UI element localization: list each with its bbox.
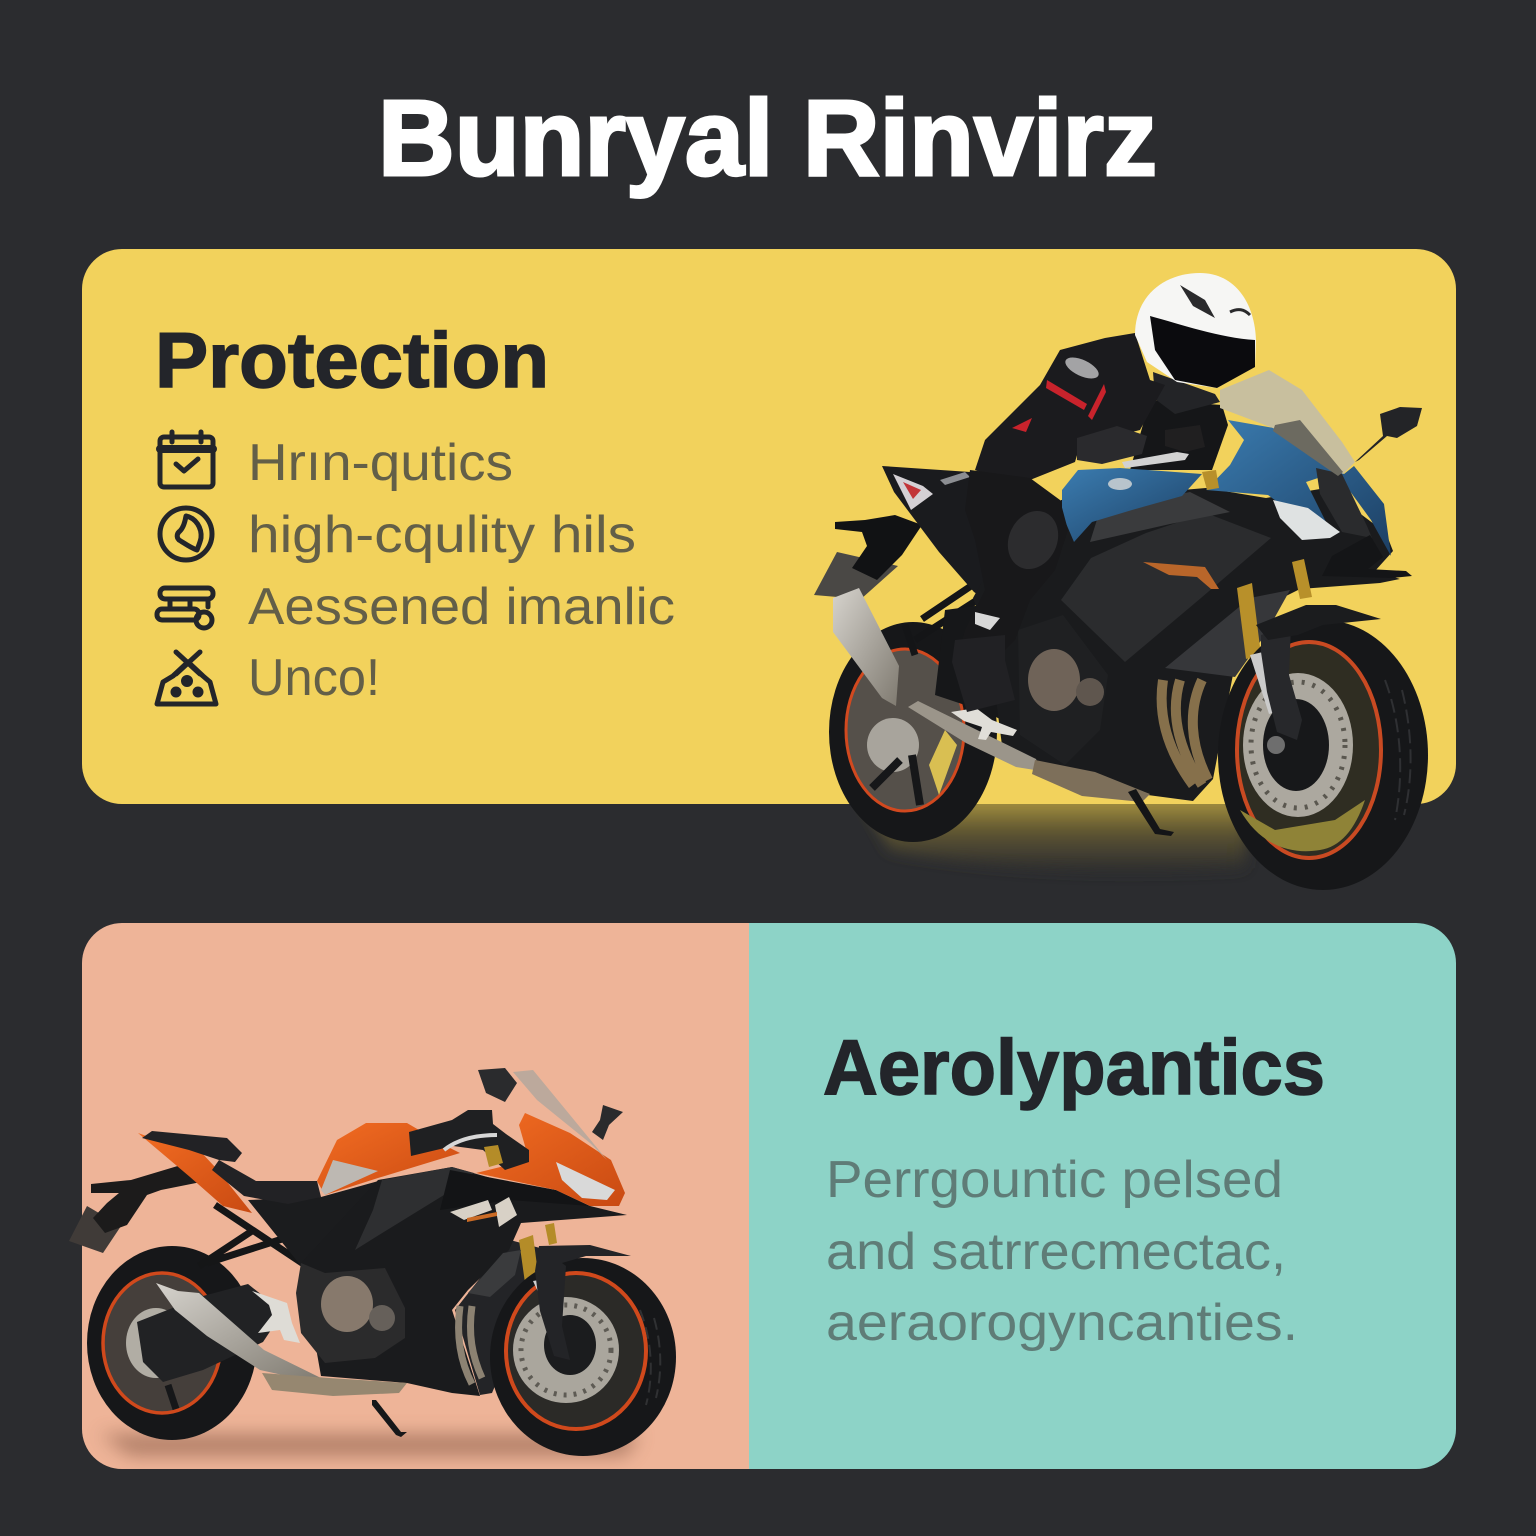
- mirrors: [1153, 372, 1220, 414]
- body text: and satrrecmectac,: [826, 1223, 1286, 1281]
- chrome fork tube: [533, 1279, 560, 1320]
- exhaust collector: [1032, 760, 1150, 802]
- chrome fork tube: [1250, 652, 1281, 714]
- trousers: [960, 470, 1068, 650]
- grey tank flank: [1090, 492, 1230, 542]
- rider: [952, 273, 1256, 712]
- foot peg: [951, 708, 1017, 740]
- seat highlight: [940, 472, 970, 485]
- tail fairing orange: [138, 1133, 252, 1213]
- kickstand: [1128, 789, 1174, 836]
- knee pad: [999, 503, 1067, 577]
- headlight: [1273, 500, 1340, 540]
- right mirror: [1355, 407, 1422, 462]
- boot: [952, 635, 1015, 712]
- rear wheel: [87, 1246, 257, 1440]
- blue upper fairing: [1206, 420, 1391, 556]
- windscreen: [1220, 370, 1355, 474]
- windscreen dark lower: [1273, 420, 1343, 476]
- front fender and fork leg: [535, 1245, 631, 1360]
- list item 3: Aessened imanlic: [248, 578, 675, 636]
- jacket red accent: [1012, 380, 1106, 432]
- front fender: [1256, 605, 1381, 640]
- radiator: [468, 1250, 521, 1297]
- handlebar lever: [1122, 452, 1189, 468]
- left mirror: [478, 1068, 517, 1102]
- helmet: [1135, 273, 1256, 388]
- tail bracket: [91, 1165, 206, 1233]
- gold forks: [1202, 470, 1312, 659]
- windscreen: [513, 1070, 607, 1160]
- upper fairing panel: [1061, 513, 1271, 662]
- orange decal: [1143, 562, 1219, 589]
- foot peg: [252, 1291, 300, 1343]
- tail bracket: [835, 515, 922, 580]
- handlebar and dash: [409, 1110, 529, 1170]
- licence plate: [69, 1206, 121, 1253]
- headers: [458, 1306, 482, 1384]
- tank grey panel: [321, 1160, 378, 1195]
- tail light: [893, 474, 933, 510]
- icon: crossed pile: [157, 652, 216, 704]
- swingarm: [137, 1284, 283, 1382]
- blue tank: [1062, 468, 1202, 542]
- rear wheel: [829, 622, 997, 842]
- radiator backing: [455, 1240, 540, 1395]
- ground glow under blue motorcycle: [870, 804, 1250, 868]
- jacket: [975, 333, 1165, 480]
- tail section: [882, 466, 1004, 612]
- chin and turn signal: [1322, 535, 1412, 578]
- main fairing: [301, 1167, 627, 1396]
- muffler and exhaust: [156, 1283, 325, 1380]
- panel: aerodynamics: [82, 923, 1456, 1469]
- black shoulder band: [440, 1170, 590, 1210]
- rear frame block: [248, 1180, 419, 1266]
- heading: protection: Protection: [155, 316, 549, 404]
- chrome lever: [444, 1135, 497, 1150]
- panel half: peach image area: [82, 923, 749, 1469]
- headlight: [556, 1162, 615, 1200]
- front wheel: [1218, 620, 1428, 890]
- icon: bench with gear: [157, 588, 213, 628]
- title: Bunryal Rinvirz: [378, 77, 1157, 198]
- fork leg: [1261, 625, 1302, 740]
- seat: [142, 1131, 321, 1204]
- panel: protection: [82, 249, 1456, 804]
- right mirror: [592, 1105, 623, 1140]
- gold fork: [484, 1145, 557, 1283]
- icon: calendar check: [160, 432, 213, 487]
- engine: [296, 1263, 405, 1363]
- icon: clock dial: [160, 508, 212, 560]
- list item 2: high-cqulity hils: [248, 506, 636, 564]
- front wheel: [490, 1258, 676, 1456]
- glove: [1077, 426, 1147, 464]
- orange tank: [317, 1123, 460, 1195]
- body text: Perrgountic pelsed: [826, 1151, 1283, 1209]
- radiator: [1165, 590, 1290, 677]
- body silhouette: [973, 488, 1400, 801]
- boot stripe: [975, 612, 1000, 630]
- illustration: blue motorcycle with rider: [814, 273, 1428, 890]
- tank logo: [1108, 478, 1132, 490]
- panel half: teal text area: [749, 923, 1456, 1469]
- body text: [826, 1151, 1298, 1352]
- list item 4: Unco!: [248, 649, 380, 707]
- illustration: orange motorcycle: [69, 1068, 676, 1456]
- dash: [1165, 425, 1205, 452]
- controls block behind fairing: [1130, 400, 1228, 470]
- licence plate: [814, 552, 898, 599]
- subframe struts: [199, 1205, 305, 1266]
- decal: [450, 1197, 517, 1227]
- fairing highlight: [355, 1167, 474, 1250]
- panel background: yellow: [82, 249, 1456, 804]
- body text: aeraorogyncanties.: [826, 1294, 1298, 1352]
- shoulder badge: [1062, 353, 1102, 383]
- frame fill behind boot: [935, 600, 1025, 730]
- list item 1: Hrın-qutics: [248, 434, 513, 492]
- muffler: [833, 588, 899, 706]
- exhaust pipe: [908, 701, 1041, 771]
- orange nose fairing: [476, 1113, 625, 1206]
- engine: [1018, 615, 1108, 765]
- subframe struts: [905, 586, 985, 655]
- kickstand: [372, 1400, 407, 1437]
- bronze headers: [1162, 680, 1208, 785]
- black nose: [1316, 468, 1372, 538]
- heading: aerodynamics: Aerolypantics: [823, 1023, 1325, 1111]
- underbelly collector: [262, 1373, 407, 1396]
- ground shadow: [100, 1434, 640, 1456]
